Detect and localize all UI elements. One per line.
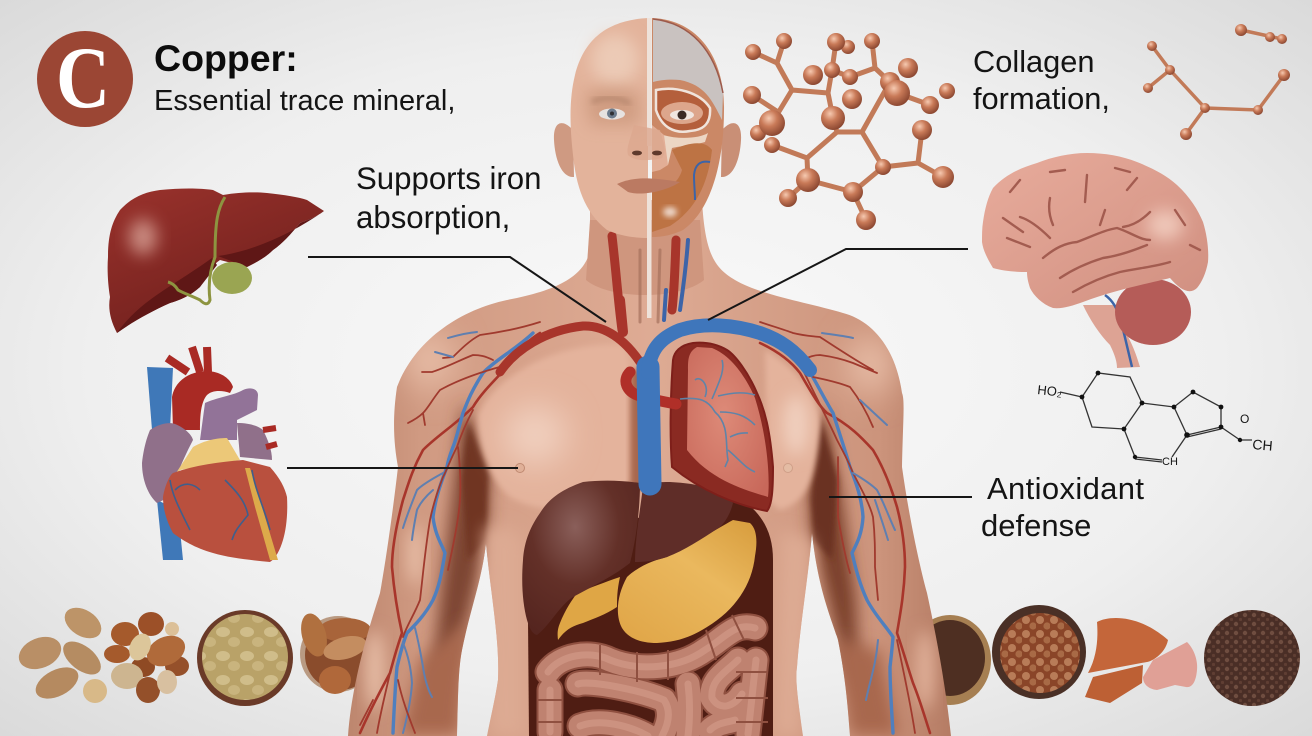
chemical structure diagram: [1037, 371, 1273, 468]
blood vessels: [360, 236, 930, 733]
skull edge: [653, 19, 723, 93]
midline divider lower: [647, 186, 652, 318]
line to heart: [287, 467, 518, 469]
text: Antioxidant defense: defense: [981, 508, 1091, 543]
red carotid junction: [620, 300, 623, 332]
icon: copper molecule large: [743, 33, 955, 230]
icon: heart: [142, 347, 287, 562]
right arm blue branches: [822, 333, 895, 700]
aorta branches: [167, 347, 208, 372]
right pectoral highlight: [783, 395, 809, 455]
midline divider upper: [647, 18, 652, 146]
text: Collagen formation: Collagen: [973, 44, 1095, 79]
nose: [627, 125, 665, 160]
chemical structure diagram: CH: [1162, 456, 1178, 468]
nipple right: [784, 464, 792, 472]
cerebellum: [1115, 279, 1191, 345]
liver highlight: [129, 219, 157, 255]
fissure and bile duct: [168, 197, 225, 304]
exposed eyelid: [661, 102, 703, 124]
brainstem: [1083, 305, 1140, 368]
food: dark seeds: [1204, 610, 1300, 706]
brain highlight: [1147, 210, 1183, 240]
cheek pale band: [663, 133, 708, 165]
superior vena cava: [147, 367, 173, 430]
exposed eye: [670, 110, 694, 120]
head right half: [652, 18, 724, 237]
stomach lobe: [558, 577, 620, 640]
intestines: [538, 615, 768, 736]
text: Antioxidant defense: Antioxidant: [987, 471, 1144, 506]
left arm branches: [360, 322, 540, 733]
liver underside: [117, 211, 324, 333]
nipple left: [516, 464, 524, 472]
ventricle: [163, 460, 287, 562]
liver left lobe: [635, 482, 733, 562]
text: Supports iron absorption: [356, 161, 542, 235]
neck shading: [586, 220, 704, 295]
text: Collagen formation: formation,: [973, 81, 1110, 116]
temple shadow: [585, 88, 640, 125]
aortic arch: [172, 371, 233, 430]
stem vessels: [1105, 295, 1132, 367]
yellow band: [165, 438, 240, 490]
neck veins: [664, 240, 688, 320]
brain sulci: [1003, 168, 1200, 292]
logo: C badge: C: [56, 28, 110, 126]
right ear: [721, 123, 741, 177]
nose right half: [652, 125, 668, 172]
text: Collagen formation: [973, 44, 1110, 116]
cheek muscle: [652, 143, 712, 232]
left arm main artery: [360, 333, 540, 733]
yellow stripe: [245, 468, 278, 560]
left pectoral: [478, 345, 637, 509]
body shading: [366, 330, 934, 736]
food: bowl of dark powder: [909, 615, 991, 705]
left eye: [599, 108, 625, 120]
trachea: [640, 250, 660, 322]
abdominal cavity: [528, 495, 773, 736]
pulmonary trunk: [200, 388, 258, 440]
jaw pale spot: [663, 207, 677, 217]
icon: liver: [108, 188, 324, 333]
left ear: [554, 123, 574, 177]
right atrium: [237, 423, 272, 460]
right arm main vein: [760, 333, 893, 733]
facial blue vessel: [694, 162, 710, 200]
sternum shadow: [630, 370, 644, 490]
left pectoral highlight: [503, 405, 567, 465]
text: Supports iron absorption: absorption,: [356, 200, 510, 235]
food: bowl of red beans: [992, 605, 1086, 699]
left arm second vein: [403, 473, 443, 733]
blue arch: [648, 325, 810, 372]
logo: C badge: [37, 28, 133, 127]
right pectoral: [765, 350, 820, 510]
blue vena cava: [648, 367, 650, 484]
left atrium: [142, 423, 193, 503]
forehead highlight: [591, 34, 639, 86]
liver right lobe: [522, 481, 640, 635]
right arm main artery: [760, 343, 930, 733]
text: Antioxidant defense: [981, 471, 1144, 543]
icon: copper molecule small: [1143, 24, 1290, 140]
left eyebrow: [592, 98, 630, 104]
eye socket muscle: [656, 89, 710, 132]
food: liver slices: [1085, 618, 1197, 703]
line to iron absorption: [308, 257, 606, 322]
left shoulder blue branches: [435, 332, 477, 357]
aortic arch: [500, 326, 640, 372]
text: Supports iron absorption: Supports iron: [356, 161, 542, 196]
lung: [671, 343, 773, 511]
line to brain: [708, 249, 968, 320]
food: bowl of almonds: [297, 611, 376, 694]
right arm branches: [760, 322, 915, 733]
skull cap: [653, 19, 723, 120]
inferior vena cava: [157, 500, 183, 560]
food: bowl of grains: [197, 610, 293, 706]
neck carotids: [612, 236, 676, 330]
coronary vessels: [170, 470, 270, 540]
torso and arms: [348, 200, 951, 736]
left arm main vein: [393, 333, 533, 733]
chemical structure diagram: CH: [1252, 436, 1273, 454]
stomach: [618, 520, 756, 643]
lips: [617, 178, 680, 194]
red stubs: [263, 428, 277, 447]
head left half: [571, 18, 648, 238]
chemical structure diagram: O: [1240, 412, 1249, 426]
text: Essential trace mineral: Essential trace mineral,: [154, 85, 455, 117]
cerebrum: [982, 153, 1208, 308]
food: peanuts and almonds: [14, 601, 190, 705]
icon: brain: [982, 153, 1208, 368]
chemical structure diagram: HO₂: [1037, 382, 1063, 400]
gallbladder: [212, 262, 252, 294]
pointer lines: [287, 249, 972, 497]
line to antioxidant: [829, 496, 972, 498]
human body figure: [348, 18, 951, 736]
red aortic loop: [626, 372, 676, 404]
heading: Copper: Copper:: [154, 37, 298, 79]
